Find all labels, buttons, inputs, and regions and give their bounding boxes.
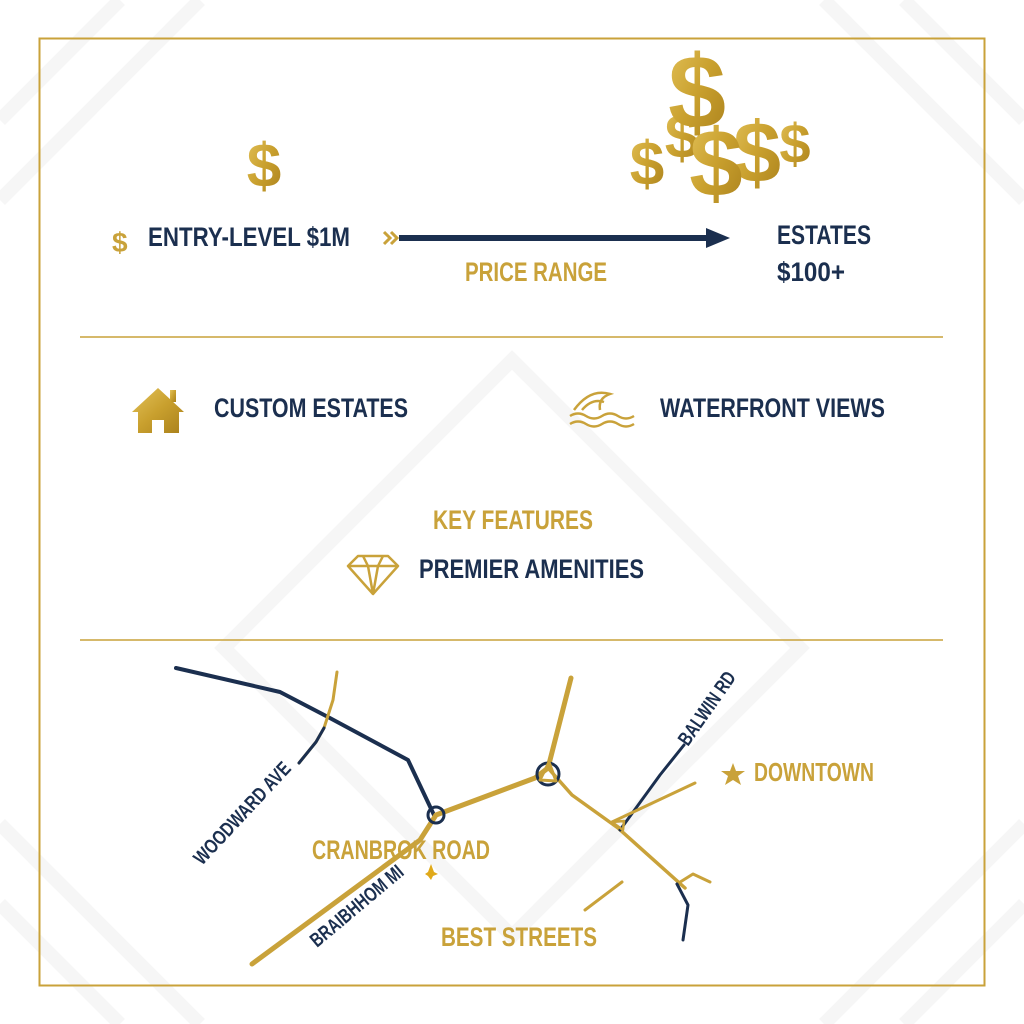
- label: downtown: [721, 757, 874, 787]
- panel: price range: [112, 35, 871, 287]
- icon: dollar cluster: $: [779, 112, 811, 175]
- label: cranbrok road: CRANBROK ROAD: [312, 835, 490, 865]
- icon: dollar cluster: $: [665, 103, 699, 172]
- icon: dollar cluster: [630, 35, 811, 217]
- arrow: price range: [384, 228, 730, 248]
- heading: key features: KEY FEATURES: [433, 505, 593, 535]
- icon: dollar cluster: $: [630, 130, 664, 199]
- label: price range: PRICE RANGE: [465, 257, 607, 287]
- icon: house: [132, 388, 184, 433]
- text: premier amenities: PREMIER AMENITIES: [419, 554, 644, 584]
- icon: dollar cluster: $: [689, 110, 743, 217]
- icon: diamond: [348, 556, 398, 594]
- icon: dollar cluster: $: [668, 35, 726, 151]
- icon: small star: [425, 864, 438, 880]
- icon: waves: [570, 393, 634, 426]
- text: entry level: ENTRY-LEVEL $1M: [148, 222, 350, 252]
- icon: single dollar: $: [247, 132, 281, 201]
- label: woodward ave: WOODWARD AVE: [190, 758, 296, 869]
- map roads: [176, 668, 710, 964]
- icon: dollar cluster: $: [733, 105, 781, 201]
- label: braibhhom mi: BRAIBHHOM MI: [306, 861, 408, 952]
- label: downtown: DOWNTOWN: [754, 757, 874, 787]
- text: estates: $100+: [777, 257, 845, 287]
- text: entry level: $: [112, 227, 128, 258]
- text: waterfront views: WATERFRONT VIEWS: [660, 393, 885, 423]
- label: best streets: BEST STREETS: [441, 922, 597, 952]
- text: custom estates: CUSTOM ESTATES: [214, 393, 408, 423]
- text: estates: ESTATES: [777, 220, 871, 250]
- text: estates: [777, 220, 871, 287]
- panel: key features: [132, 388, 885, 594]
- text: entry level: [112, 222, 350, 258]
- panel: map: [176, 668, 874, 964]
- label: balwin rd: BALWIN RD: [674, 668, 741, 750]
